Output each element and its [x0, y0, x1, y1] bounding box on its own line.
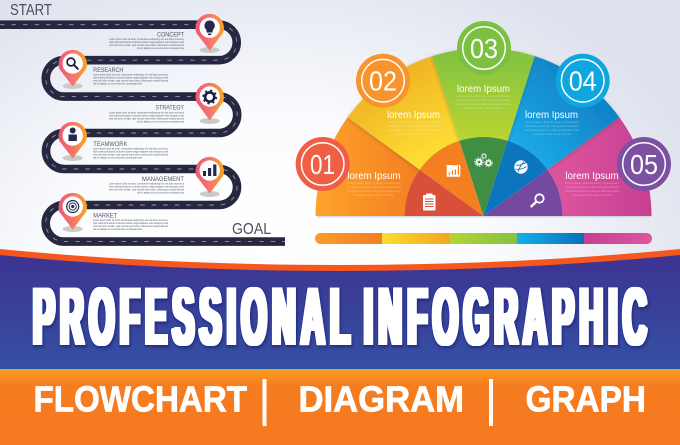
badge 02 [356, 54, 410, 108]
text block 3: sed diam nonummy nibh euismod tincidunt [456, 98, 510, 102]
step: concept: nisl ut aliquip ex ea commodo consequat duis [137, 46, 184, 50]
step: market [59, 193, 168, 232]
step: research: Lorem ipsum dolor sit amet, consectetuer adipiscing elit, sed diam nonummy [93, 72, 168, 76]
text block 5: lorem Ipsum [566, 170, 619, 182]
text block 3 [456, 83, 510, 110]
badge 01 [296, 137, 350, 191]
step: concept: CONCEPT [157, 32, 184, 39]
text block 5: Lorem ipsum dolor sit amet, consectetuer [565, 181, 619, 185]
inner wedge: red [404, 170, 484, 216]
step: strategy: enim ad minim veniam, quis nostrud exerci tation ullamcorper suscipit lobortis [109, 116, 184, 120]
label: flowchart: FLOWCHART [34, 379, 247, 420]
text block 2: lorem Ipsum [387, 109, 440, 121]
text block 2: Lorem ipsum dolor sit amet, consectetuer [387, 120, 441, 124]
text block 2: sed diam nonummy nibh euismod tincidunt [387, 124, 441, 128]
badge 05: 05 [630, 149, 658, 180]
text block 3: lorem Ipsum [457, 83, 510, 95]
badge 04 [556, 54, 610, 108]
text block 4: volutpat wisi enim minim [532, 132, 572, 136]
step: research: nibh euismod tincidunt ut laoreet dolore magna aliquam erat volutpat ut wisi [93, 75, 168, 79]
step: management: MANAGEMENT [142, 176, 184, 183]
step: strategy: nisl ut aliquip ex ea commodo consequat duis [137, 119, 184, 123]
text block 5: sed diam nonummy nibh euismod tincidunt [565, 185, 619, 189]
colour legend bar [315, 233, 652, 244]
text block 4: lorem Ipsum [525, 109, 578, 121]
step: teamwork: nibh euismod tincidunt ut laoreet dolore magna aliquam erat volutpat ut wisi [93, 149, 168, 153]
step: teamwork: TEAMWORK [93, 141, 128, 148]
step: strategy [109, 83, 224, 124]
badge 03: 03 [470, 33, 498, 64]
segment 5 [547, 117, 652, 216]
text block 3: Lorem ipsum dolor sit amet, consectetuer [456, 94, 510, 98]
inner wedge: blue [484, 141, 547, 216]
step: market: nibh euismod tincidunt ut laoreet dolore magna aliquam erat volutpat ut wisi [93, 221, 168, 225]
text block 1: sed diam nonummy nibh euismod tincidunt [347, 185, 401, 189]
segment 2 [348, 56, 459, 170]
start label: START [10, 2, 52, 19]
text block 2: volutpat wisi enim minim [394, 132, 434, 136]
footer band [0, 368, 680, 445]
step: research [59, 50, 168, 89]
text block 1: lorem Ipsum [348, 170, 401, 182]
badge 03 [457, 21, 511, 75]
badge 05 [617, 137, 671, 191]
step: teamwork: Lorem ipsum dolor sit amet, consectetuer adipiscing elit, sed diam nonummy [93, 146, 168, 150]
step: teamwork [59, 122, 168, 161]
step: management: nibh euismod tincidunt ut laoreet dolore magna aliquam erat volutpat ut wisi [109, 184, 184, 188]
badge 02: 02 [369, 66, 397, 97]
text block 2 [387, 109, 441, 136]
step: strategy: nibh euismod tincidunt ut laoreet dolore magna aliquam erat volutpat ut wisi [109, 113, 184, 117]
step: market: nisl ut aliquip ex ea commodo consequat duis [93, 227, 142, 231]
text block 1: volutpat wisi enim minim [354, 193, 394, 197]
icon: gears [475, 154, 492, 167]
text block 5 [565, 170, 619, 197]
badge 01: 01 [310, 149, 335, 180]
step: concept: nibh euismod tincidunt ut laoreet dolore magna aliquam erat volutpat ut wisi [109, 40, 184, 44]
text block 4: ut laoreet dolore magna aliquam erat [525, 128, 579, 132]
text block 1: ut laoreet dolore magna aliquam erat [347, 189, 401, 193]
step: research: RESEARCH [93, 67, 124, 74]
goal label: GOAL [232, 221, 271, 238]
segment 3 [432, 48, 535, 141]
step: teamwork: nisl ut aliquip ex ea commodo consequat duis [93, 155, 142, 159]
step: concept [109, 14, 224, 53]
divider 1 [262, 379, 266, 426]
step: market: Lorem ipsum dolor sit amet, consectetuer adipiscing elit, sed diam nonummy [93, 218, 168, 222]
step: market: MARKET [93, 212, 117, 220]
step: management [109, 157, 224, 197]
label: diagram: DIAGRAM [298, 379, 464, 420]
step: teamwork: enim ad minim veniam, quis nostrud exerci tation ullamcorper suscipit lobortis [93, 152, 168, 156]
text block 3: ut laoreet dolore magna aliquam erat [456, 102, 510, 106]
icon: clipboard [423, 194, 436, 210]
road [0, 25, 285, 242]
text block 5: volutpat wisi enim minim [572, 193, 612, 197]
icon: globe [514, 160, 528, 174]
step: concept: enim ad minim veniam, quis nostrud exerci tation ullamcorper suscipit lobortis [109, 43, 184, 47]
icon: bar chart [447, 165, 460, 176]
text block 1 [347, 170, 401, 197]
text block 4: Lorem ipsum dolor sit amet, consectetuer [525, 120, 579, 124]
step: management: enim ad minim veniam, quis nostrud exerci tation ullamcorper suscipit lobortis [109, 187, 184, 191]
text block 4 [525, 109, 579, 136]
inner wedge: orange [420, 141, 484, 216]
segment 1 [316, 117, 420, 216]
label: graph: GRAPH [526, 379, 646, 420]
step: research: enim ad minim veniam, quis nostrud exerci tation ullamcorper suscipit lobortis [93, 78, 168, 82]
text block 4: sed diam nonummy nibh euismod tincidunt [525, 124, 579, 128]
step: strategy: STRATEGY [156, 104, 185, 112]
text block 1: Lorem ipsum dolor sit amet, consectetuer [347, 181, 401, 185]
segment 4 [508, 56, 619, 170]
icon: magnifier [532, 194, 544, 206]
step: strategy: Lorem ipsum dolor sit amet, consectetuer adipiscing elit, sed diam nonummy [109, 110, 184, 114]
step: concept: Lorem ipsum dolor sit amet, consectetuer adipiscing elit, sed diam nonummy [109, 37, 184, 41]
road roadmap panel [0, 2, 285, 242]
text block 5: ut laoreet dolore magna aliquam erat [565, 189, 619, 193]
step: research: nisl ut aliquip ex ea commodo consequat duis [93, 81, 142, 85]
inner wedge: green [459, 137, 508, 216]
inner wedge: purple [484, 170, 562, 216]
step: management: nisl ut aliquip ex ea commodo consequat duis [137, 190, 184, 194]
text block 2: ut laoreet dolore magna aliquam erat [387, 128, 441, 132]
step: management: Lorem ipsum dolor sit amet, consectetuer adipiscing elit, sed diam nonummy [109, 181, 184, 185]
badge 04: 04 [569, 66, 597, 97]
text block 3: volutpat wisi enim minim [463, 106, 503, 110]
step: market: enim ad minim veniam, quis nostrud exerci tation ullamcorper suscipit lobortis [93, 224, 168, 228]
divider 2 [489, 379, 493, 426]
semicircle fan chart [296, 21, 671, 218]
banner: blue wave with orange edge [0, 249, 680, 369]
